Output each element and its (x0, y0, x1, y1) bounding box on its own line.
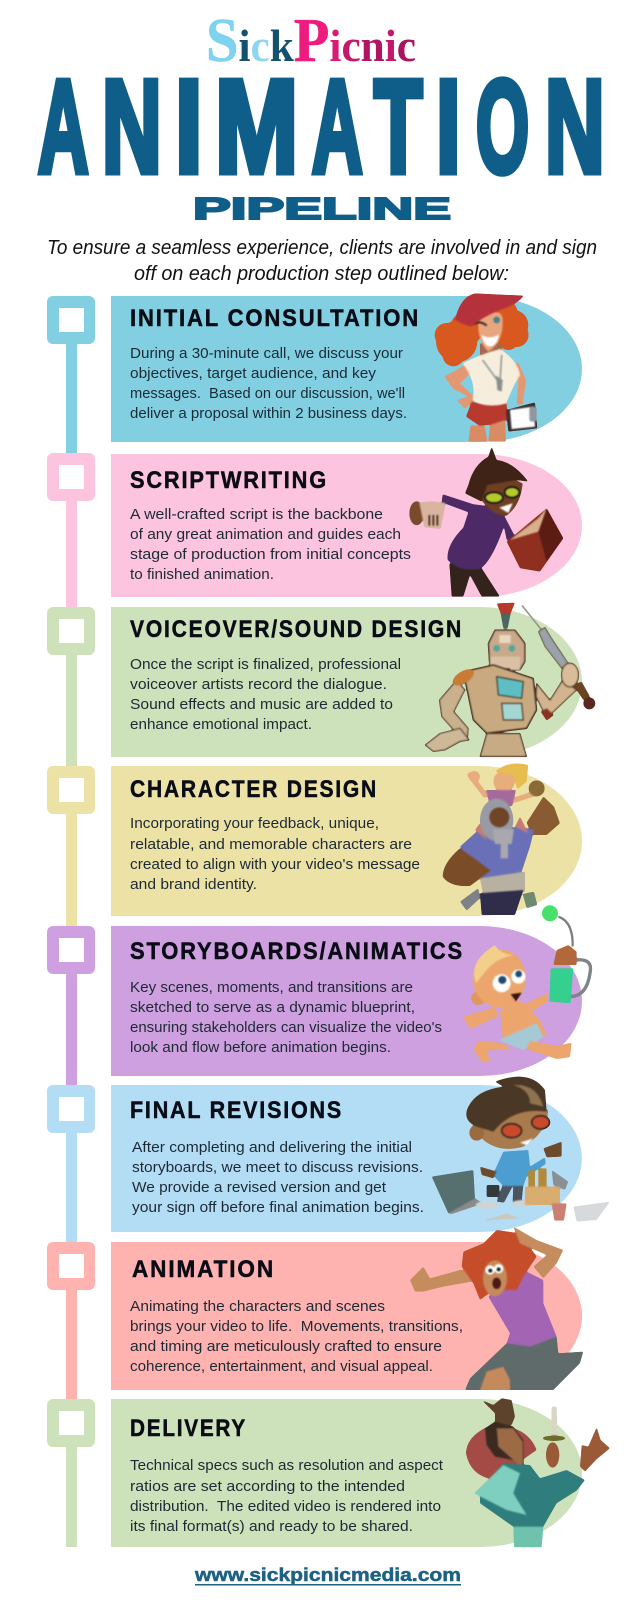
panel: final revisions: After completing and delivering the initial (132, 1139, 412, 1156)
title: ANIMATION: O (476, 53, 529, 200)
icon: man with child on shoulders (443, 763, 560, 915)
panel: voiceover / sound design: Once the script is finalized, professional (130, 656, 401, 673)
panel: animation (111, 1242, 582, 1390)
title: ANIMATION: T (374, 53, 423, 200)
panel: delivery: its final format(s) and ready to be shared. (130, 1518, 413, 1535)
intro text: To ensure a seamless experience, clients are involved in and sign (47, 236, 597, 259)
panel: final revisions: FINAL REVISIONS (130, 1097, 343, 1124)
title: ANIMATION: N (102, 53, 162, 200)
panel: animation: brings your video to life. Movements, transitions, (130, 1318, 463, 1335)
panel: delivery (111, 1399, 582, 1547)
timeline (47, 296, 95, 1547)
icon: writer with mug and book (409, 447, 563, 597)
icon: robot with sword (425, 603, 595, 757)
panel: initial consultation (111, 296, 582, 442)
icon: wizard with candle (466, 1398, 610, 1547)
panel: character design: relatable, and memorable characters are (130, 836, 412, 853)
panel: initial consultation: deliver a proposal within 2 business days. (130, 405, 407, 422)
panel: voiceover / sound design: enhance emotional impact. (130, 716, 312, 733)
icon: developer with laptop and tools (432, 1077, 610, 1222)
footer url: www.sickpicnicmedia.com (194, 1564, 461, 1585)
title: ANIMATION: M (215, 53, 299, 200)
panel: character design: created to align with your video's message (130, 856, 420, 873)
panel: delivery: Technical specs such as resolution and aspect (130, 1457, 444, 1474)
panel: initial consultation: objectives, target audience, and key (130, 365, 377, 382)
panel: animation: and timing are meticulously crafted to ensure (130, 1338, 442, 1355)
panel: animation: coherence, entertainment, and visual appeal. (130, 1358, 433, 1375)
panel: delivery: DELIVERY (130, 1415, 247, 1442)
subtitle: PIPELINE: PIPELINE (193, 191, 451, 226)
title: ANIMATION (37, 53, 605, 200)
panel: animation: ANIMATION (132, 1256, 275, 1283)
panel: scriptwriting: to finished animation. (130, 566, 274, 583)
intro text: off on each production step outlined below: (134, 262, 509, 285)
title: ANIMATION: A (312, 53, 362, 200)
icon: baby with glowing jar (463, 905, 591, 1063)
panel: scriptwriting: SCRIPTWRITING (130, 467, 328, 494)
panel: storyboards / animatics: Key scenes, moments, and transitions are (130, 979, 413, 996)
panel: character design: CHARACTER DESIGN (130, 776, 378, 803)
panel: final revisions: your sign off before final animation begins. (132, 1199, 424, 1216)
panel: voiceover / sound design: Sound effects and music are added to (130, 696, 393, 713)
panel: initial consultation: During a 30-minute call, we discuss your (130, 345, 403, 362)
panel: voiceover / sound design (111, 607, 582, 757)
panel: final revisions: storyboards, we meet to discuss revisions. (132, 1159, 423, 1176)
panel: animation: Animating the characters and scenes (130, 1298, 385, 1315)
title: ANIMATION: I (436, 53, 461, 200)
panel: scriptwriting: of any great animation and guides each (130, 526, 401, 543)
icon: woman in red cap with clipboard (435, 293, 537, 442)
panel: delivery: distribution. The edited video is rendered into (130, 1498, 441, 1515)
panel: initial consultation: INITIAL CONSULTATION (130, 305, 420, 332)
logo: Sick Picnic: SickPicnic (206, 7, 416, 75)
panel: storyboards / animatics: sketched to serve as a dynamic blueprint, (130, 999, 415, 1016)
panel: character design (111, 766, 582, 916)
panel: scriptwriting: A well-crafted script is the backbone (130, 506, 383, 523)
panel: storyboards / animatics (111, 926, 582, 1076)
panel: final revisions: We provide a revised version and get (132, 1179, 387, 1196)
intro text (47, 236, 597, 285)
panel: initial consultation: messages. Based on our discussion, we'll (130, 385, 405, 402)
panel: voiceover / sound design: voiceover artists record the dialogue. (130, 676, 387, 693)
panel: voiceover / sound design: VOICEOVER/SOUND DESIGN (130, 616, 463, 643)
panel: scriptwriting: stage of production from initial concepts (130, 546, 411, 563)
panel: storyboards / animatics: ensuring stakeholders can visualize the video's (130, 1019, 442, 1036)
panel: character design: Incorporating your feedback, unique, (130, 815, 379, 832)
icon: panicked woman with red hair (410, 1227, 583, 1390)
panel: storyboards / animatics: STORYBOARDS/ANIMATICS (130, 938, 464, 965)
title: ANIMATION: A (38, 53, 88, 200)
panel: scriptwriting (111, 454, 582, 597)
panel: delivery: ratios are set according to the intended (130, 1478, 405, 1495)
panel: character design: and brand identity. (130, 876, 257, 893)
title: ANIMATION: I (175, 53, 202, 200)
panel: final revisions (111, 1085, 582, 1232)
panel: storyboards / animatics: look and flow before animation begins. (130, 1039, 391, 1056)
title: ANIMATION: N (545, 53, 605, 200)
